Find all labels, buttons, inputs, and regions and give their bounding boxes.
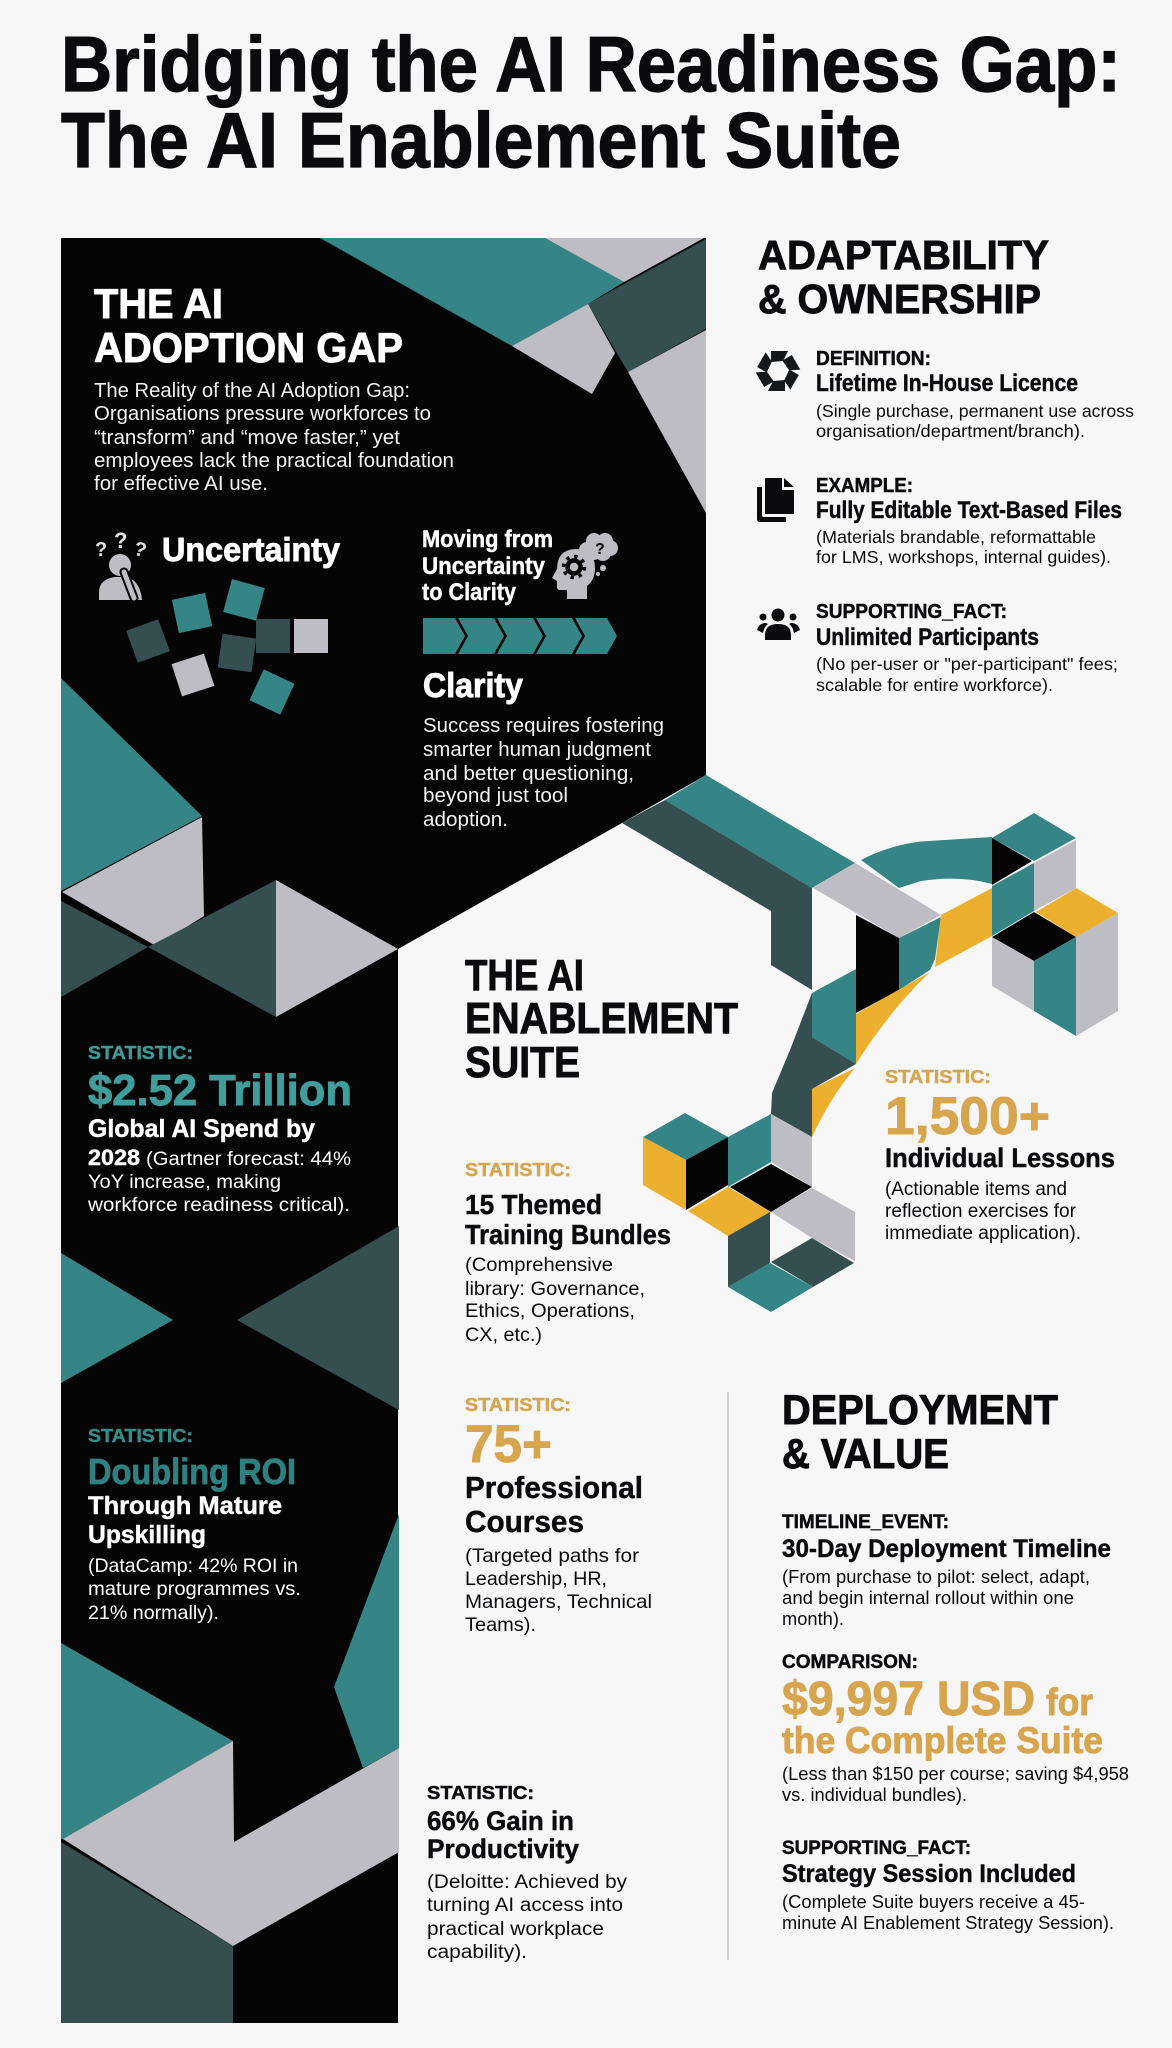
text block: success requires: beyond just tool bbox=[423, 785, 568, 807]
title: The AI Enablement Suite bbox=[61, 96, 901, 184]
text block: success requires: smarter human judgment bbox=[423, 739, 651, 761]
statistic: 1,500+ lessons: reflection exercises for bbox=[885, 1201, 1077, 1222]
text: moving from uncertainty to clarity: to Clarity bbox=[422, 579, 517, 606]
item: deployment timeline bbox=[782, 1512, 1111, 1629]
statistic: 1,500+ lessons: 1,500+ bbox=[885, 1087, 1050, 1146]
statistic: doubling ROI: Through Mature bbox=[88, 1492, 282, 1520]
label: clarity: Clarity bbox=[423, 667, 523, 705]
text block: success requires bbox=[423, 715, 664, 831]
statistic: 15 bundles: Training Bundles bbox=[465, 1219, 671, 1250]
text block: success requires: Success requires fostering bbox=[423, 715, 664, 737]
icon: confused person: ? bbox=[114, 528, 127, 553]
item: unlimited participants: SUPPORTING_FACT: bbox=[816, 601, 1007, 623]
item: deployment timeline: month). bbox=[782, 1609, 844, 1629]
item: strategy session: SUPPORTING_FACT: bbox=[782, 1838, 971, 1859]
statistic: 1,500+ lessons: STATISTIC: bbox=[885, 1067, 991, 1087]
statistic: 1,500+ lessons: immediate application). bbox=[885, 1223, 1081, 1244]
text block: success requires: adoption. bbox=[423, 809, 508, 831]
item: editable files: (Materials brandable, reformattable bbox=[816, 527, 1096, 547]
statistic: 1,500+ lessons: Individual Lessons bbox=[885, 1143, 1115, 1173]
item: strategy session: minute AI Enablement Strategy Session). bbox=[782, 1913, 1114, 1933]
item: lifetime licence: organisation/department/branch). bbox=[816, 421, 1085, 441]
label: uncertainty: Uncertainty bbox=[162, 531, 341, 568]
text block: reality of the gap: “transform” and “move faster,” yet bbox=[94, 427, 400, 449]
text block: success requires: and better questioning, bbox=[423, 763, 634, 785]
statistic: 66% productivity: (Deloitte: Achieved by bbox=[427, 1872, 628, 1893]
item: editable files: for LMS, workshops, internal guides). bbox=[816, 547, 1111, 567]
item: lifetime licence bbox=[816, 348, 1134, 441]
statistic: $2.52 trillion: (Gartner forecast: 44% bbox=[146, 1148, 351, 1170]
statistic: 15 bundles: Ethics, Operations, bbox=[465, 1300, 635, 1322]
isometric connector graphic bbox=[622, 775, 1118, 1312]
statistic: 1,500+ lessons bbox=[885, 1067, 1115, 1244]
icon: documents bbox=[757, 478, 794, 522]
statistic: 66% productivity: 66% Gain in bbox=[427, 1806, 574, 1836]
statistic: $2.52 trillion: Global AI Spend by bbox=[88, 1115, 315, 1143]
item: editable files: Fully Editable Text-Based Files bbox=[816, 497, 1122, 524]
statistic: 1,500+ lessons: (Actionable items and bbox=[885, 1179, 1067, 1200]
item: deployment timeline: TIMELINE_EVENT: bbox=[782, 1512, 949, 1533]
statistic: 66% productivity: practical workplace bbox=[427, 1919, 604, 1940]
statistic: 66% productivity: Productivity bbox=[427, 1834, 579, 1864]
statistic: doubling ROI bbox=[88, 1426, 301, 1624]
statistic: $2.52 trillion: 2028 bbox=[88, 1145, 140, 1170]
statistic: doubling ROI: Upskilling bbox=[88, 1521, 206, 1549]
item: deployment timeline: 30-Day Deployment Timeline bbox=[782, 1535, 1111, 1563]
heading: adaptability and ownership: ADAPTABILITY bbox=[758, 232, 1049, 278]
item: price comparison: (Less than $150 per course; saving $4,958 bbox=[782, 1764, 1129, 1784]
statistic: 75+ courses: STATISTIC: bbox=[465, 1395, 571, 1415]
statistic: 75+ courses: 75+ bbox=[465, 1415, 552, 1474]
scattered squares bbox=[126, 579, 328, 715]
item: deployment timeline: and begin internal rollout within one bbox=[782, 1588, 1074, 1608]
heading: deployment and value: DEPLOYMENT bbox=[782, 1386, 1058, 1433]
statistic: 66% productivity: STATISTIC: bbox=[427, 1783, 534, 1803]
heading: the AI enablement suite: ENABLEMENT bbox=[465, 994, 738, 1043]
text block: reality of the gap: The Reality of the AI Adoption Gap: bbox=[94, 380, 410, 402]
statistic: doubling ROI: Doubling ROI bbox=[88, 1451, 296, 1492]
icon: confused person: ? bbox=[131, 538, 149, 562]
statistic: 66% productivity bbox=[427, 1783, 628, 1963]
statistic: $2.52 trillion: YoY increase, making bbox=[88, 1171, 281, 1193]
item: unlimited participants: (No per-user or "per-participant" fees; bbox=[816, 654, 1118, 674]
heading: the AI adoption gap: THE AI bbox=[94, 280, 223, 327]
text: moving from uncertainty to clarity: Uncertainty bbox=[422, 553, 546, 580]
item: strategy session: Strategy Session Included bbox=[782, 1860, 1076, 1888]
statistic: doubling ROI: 21% normally). bbox=[88, 1602, 219, 1624]
item: lifetime licence: DEFINITION: bbox=[816, 348, 931, 370]
heading: deployment and value bbox=[782, 1386, 1058, 1477]
statistic: 66% productivity: turning AI access into bbox=[427, 1895, 623, 1916]
text: moving from uncertainty to clarity: Moving from bbox=[422, 526, 553, 553]
statistic: $2.52 trillion: workforce readiness critical). bbox=[87, 1194, 350, 1216]
statistic: $2.52 trillion: $2.52 Trillion bbox=[88, 1066, 352, 1115]
heading: the AI enablement suite bbox=[465, 951, 738, 1087]
item: unlimited participants: scalable for entire workforce). bbox=[816, 675, 1053, 695]
statistic: $2.52 trillion bbox=[87, 1043, 352, 1216]
statistic: 75+ courses: (Targeted paths for bbox=[465, 1545, 640, 1567]
icon: head with gear and thought cloud: ? bbox=[595, 541, 605, 558]
item: price comparison: COMPARISON: bbox=[782, 1652, 918, 1673]
statistic: 75+ courses: Courses bbox=[465, 1504, 584, 1539]
statistic: doubling ROI: STATISTIC: bbox=[88, 1426, 193, 1446]
icon: head with gear and thought cloud bbox=[552, 533, 618, 599]
statistic: 15 bundles: (Comprehensive bbox=[465, 1254, 613, 1276]
item: strategy session: (Complete Suite buyers receive a 45- bbox=[782, 1892, 1085, 1912]
statistic: 75+ courses: Managers, Technical bbox=[465, 1591, 652, 1613]
panel: AI adoption gap background bbox=[61, 238, 706, 2023]
item: lifetime licence: (Single purchase, permanent use across bbox=[816, 401, 1134, 421]
text: moving from uncertainty to clarity bbox=[422, 526, 553, 606]
heading: the AI enablement suite: SUITE bbox=[465, 1038, 580, 1087]
item: lifetime licence: Lifetime In-House Licence bbox=[816, 370, 1078, 397]
heading: deployment and value: & VALUE bbox=[782, 1430, 949, 1477]
statistic: 15 bundles: 15 Themed bbox=[465, 1189, 602, 1220]
heading: the AI enablement suite: THE AI bbox=[465, 951, 584, 1000]
item: price comparison: the Complete Suite bbox=[782, 1720, 1103, 1761]
statistic: doubling ROI: mature programmes vs. bbox=[88, 1578, 301, 1600]
statistic: 15 bundles: STATISTIC: bbox=[465, 1160, 571, 1180]
statistic: 15 bundles: library: Governance, bbox=[465, 1278, 645, 1300]
text block: reality of the gap: for effective AI use. bbox=[94, 473, 268, 495]
icon: confused person: ? bbox=[95, 539, 107, 561]
statistic: 15 bundles bbox=[465, 1160, 671, 1346]
item: editable files bbox=[816, 475, 1122, 567]
statistic: 75+ courses: Teams). bbox=[465, 1614, 536, 1636]
item: price comparison: $9,997 USD bbox=[782, 1673, 1035, 1726]
heading: adaptability and ownership bbox=[758, 232, 1049, 322]
text block: reality of the gap bbox=[94, 380, 454, 495]
item: strategy session bbox=[782, 1838, 1114, 1933]
statistic: doubling ROI: (DataCamp: 42% ROI in bbox=[88, 1555, 298, 1577]
item: editable files: EXAMPLE: bbox=[816, 475, 913, 497]
statistic: 15 bundles: CX, etc.) bbox=[465, 1324, 542, 1346]
icon: aperture bbox=[756, 351, 800, 391]
statistic: $2.52 trillion: STATISTIC: bbox=[88, 1043, 193, 1063]
item: deployment timeline: (From purchase to pilot: select, adapt, bbox=[782, 1567, 1090, 1587]
icon: confused person bbox=[95, 528, 149, 600]
heading: adaptability and ownership: & OWNERSHIP bbox=[758, 276, 1041, 322]
statistic: 75+ courses: Leadership, HR, bbox=[465, 1568, 607, 1590]
title bbox=[61, 20, 1121, 184]
statistic: 75+ courses: Professional bbox=[465, 1470, 643, 1505]
arrow: chevron progress bbox=[423, 618, 617, 654]
text block: reality of the gap: Organisations pressure workforces to bbox=[94, 403, 431, 425]
statistic: 75+ courses bbox=[465, 1395, 652, 1636]
heading: the AI adoption gap: ADOPTION GAP bbox=[94, 324, 403, 371]
item: unlimited participants bbox=[816, 601, 1118, 695]
item: price comparison bbox=[782, 1652, 1129, 1805]
text block: reality of the gap: employees lack the practical foundation bbox=[94, 450, 454, 472]
heading: the AI adoption gap bbox=[94, 280, 403, 371]
item: unlimited participants: Unlimited Participants bbox=[816, 624, 1039, 651]
item: price comparison: for bbox=[1046, 1682, 1093, 1724]
statistic: 66% productivity: capability). bbox=[427, 1942, 527, 1963]
icon: people bbox=[757, 608, 800, 640]
item: price comparison: vs. individual bundles). bbox=[782, 1785, 967, 1805]
